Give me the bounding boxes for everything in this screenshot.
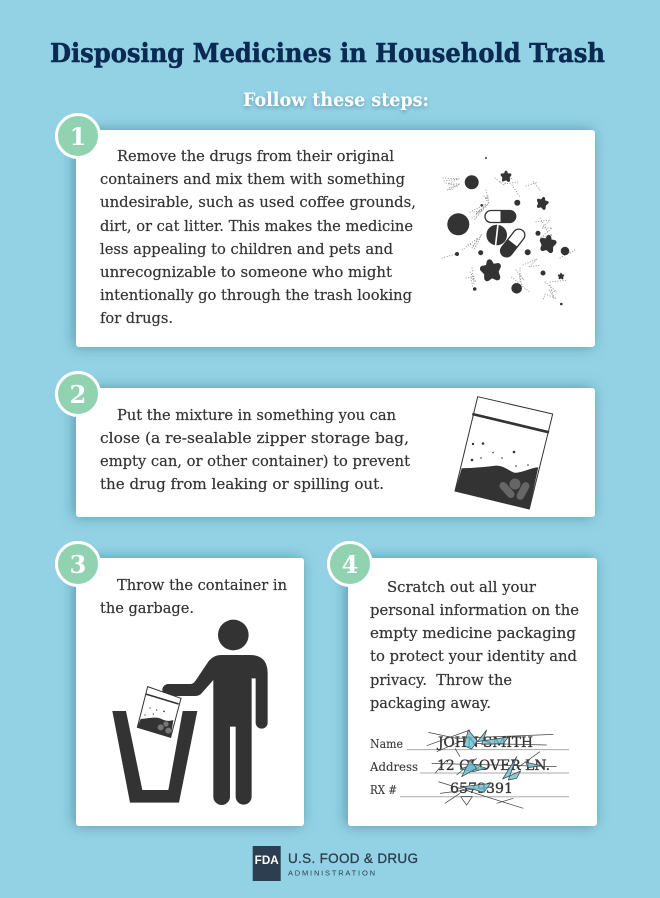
scratched-out form: Name [370,737,403,751]
step 4 text: personal information on the [370,601,579,619]
split tablet [486,224,507,246]
step 3 text: the garbage. [100,599,194,617]
step 3 text: Throw the container in [117,576,287,594]
FDA logo: U.S. FOOD & DRUG [288,851,418,866]
step 1 text: intentionally go through the trash looking [100,286,412,304]
step 1 text: less appealing to children and pets and [100,240,393,258]
card background [76,130,595,347]
step 1 text: for drugs. [100,309,173,327]
step 1 text: containers and mix them with something [100,170,405,188]
scratched-out form: RX # [370,783,397,797]
step 1 text: undesirable, such as used coffee grounds, [100,193,416,211]
scratched-out form [369,730,569,808]
panel: step 4 [328,542,597,826]
step 1 text: unrecognizable to someone who might [100,263,392,281]
icon: person dropping bag in bin [112,620,268,805]
step 1 badge [56,114,100,158]
step 3 text [100,576,287,617]
step 4 text: to protect your identity and [370,647,577,665]
step 4 text: privacy. Throw the [370,671,512,689]
diagonal capsule [498,226,528,260]
title: Disposing Medicines in Household Trash [50,39,605,69]
step 4 badge: 4 [342,550,358,579]
step 4 text: empty medicine packaging [370,624,576,642]
step 2 text: Put the mixture in something you can [117,406,396,424]
FDA logo: FDA [255,855,279,867]
horizontal capsule [485,210,516,223]
step 2 badge [56,372,100,416]
step 2 text: the drug from leaking or spilling out. [100,475,384,493]
scratched-out form: JOHN SMITH [436,735,533,751]
card background [76,388,595,517]
subtitle: Follow these steps: [243,89,429,111]
step 1 badge: 1 [70,122,86,151]
scratched-out form: 6579391 [450,781,513,797]
scratch marks [427,730,557,808]
step 4 text: packaging away. [370,694,491,712]
FDA logo: ADMINISTRATION [288,868,375,878]
step 1 text [100,147,416,327]
panel: step 3 [56,542,304,826]
step 4 text [370,578,579,712]
step 3 badge: 3 [70,550,86,579]
step 1 text: dirt, or cat litter. This makes the medicine [100,217,413,235]
scratched-out form: Address [369,760,418,774]
step 4 badge [328,542,372,586]
step 1 text: Remove the drugs from their original [117,147,394,165]
step 2 text: empty can, or other container) to prevent [100,452,410,470]
step 3 badge [56,542,100,586]
card background [76,558,304,826]
step 2 text [100,406,410,493]
scratched-out form: 12 CLOVER LN. [437,758,550,774]
FDA logo [253,846,418,881]
step 2 text: close (a re-sealable zipper storage bag, [100,429,409,447]
icon: crushed pills mixed with grounds [442,157,575,305]
icon: sealed bag with mixture [455,397,553,509]
step 2 badge: 2 [70,380,86,409]
panel: step 2 [56,372,595,517]
card background [348,558,597,826]
panel: step 1 [56,114,595,347]
step 4 text: Scratch out all your [387,578,537,596]
